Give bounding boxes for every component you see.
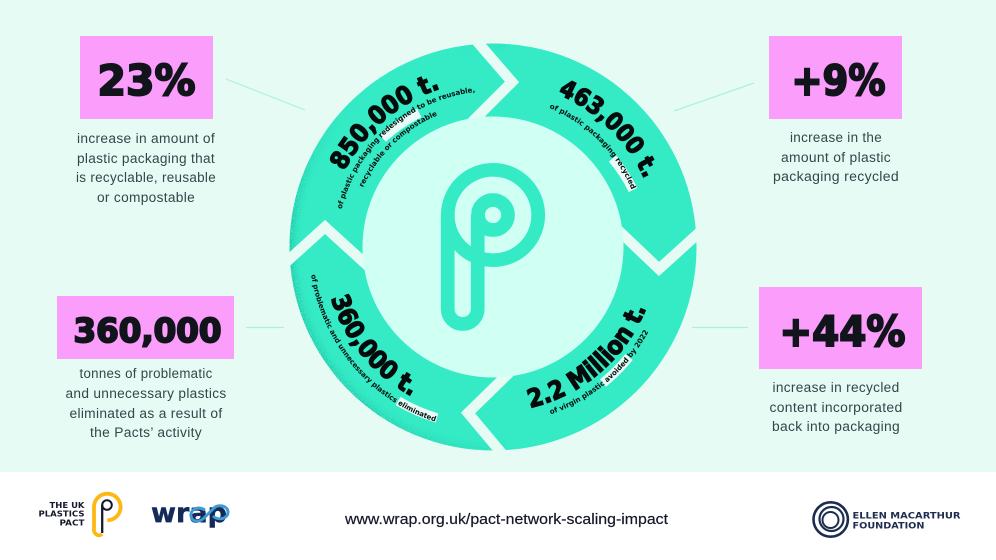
stat number: +9% xyxy=(792,56,886,105)
segment: 2.2 Million t.: of virgin plastic avoided by 2022 xyxy=(550,330,648,414)
leader line: 23% xyxy=(226,79,305,110)
stat panel: 360,000 xyxy=(57,296,234,440)
logo: WRAP: wrap xyxy=(151,498,227,529)
leader line: +44% xyxy=(692,326,748,328)
logo: The UK Plastics Pact: PLASTICS xyxy=(38,510,85,518)
stat panel: +9% xyxy=(769,36,902,184)
description xyxy=(770,380,902,434)
description: amount of plastic xyxy=(781,150,891,165)
chevron separators xyxy=(283,38,702,456)
logo: Ellen MacArthur Foundation xyxy=(814,502,961,537)
description: increase in the xyxy=(790,130,882,145)
logo: The UK Plastics Pact: PACT xyxy=(60,518,85,528)
stat panel: 23% xyxy=(76,36,216,205)
segment: 2.2 Million t.: 2.2 Million t. xyxy=(526,308,646,408)
description: content incorporated xyxy=(770,400,902,415)
inner circle xyxy=(362,116,624,378)
pink box xyxy=(769,36,902,119)
description: and unnecessary plastics xyxy=(66,386,226,401)
stat number: 360,000 xyxy=(74,311,222,350)
description: eliminated as a result of xyxy=(70,406,222,421)
stat number: 23% xyxy=(98,56,196,105)
logo: Ellen MacArthur Foundation: ELLEN MACARTHUR xyxy=(852,512,961,522)
pink box xyxy=(57,296,234,359)
description: increase in recycled xyxy=(772,380,900,395)
url: www.wrap.org.uk/pact-network-scaling-impact xyxy=(344,512,668,528)
description: is recyclable, reusable xyxy=(76,170,216,185)
circular arrow diagram xyxy=(290,44,696,450)
description: plastic packaging that xyxy=(77,151,215,166)
description: back into packaging xyxy=(772,419,900,434)
pink box xyxy=(759,287,922,369)
footer background xyxy=(0,472,996,560)
leader line: 360,000 xyxy=(246,326,284,328)
leader line: +9% xyxy=(674,83,754,111)
footer xyxy=(0,472,996,560)
segment: 850,000 t.: of plastic packaging redesigned to be reusable, xyxy=(338,88,475,208)
description xyxy=(773,130,899,184)
description: increase in amount of xyxy=(77,131,215,146)
stat panel: +44% xyxy=(759,287,922,434)
segment: 360,000 t.: of problematic and unnecessary plastics eliminated xyxy=(311,274,436,422)
ring xyxy=(290,44,696,450)
description: tonnes of problematic xyxy=(80,366,212,381)
segment: 463,000 t.: 463,000 t. xyxy=(559,80,655,178)
stat number: +44% xyxy=(780,307,906,356)
segment: 850,000 t.: 850,000 t. xyxy=(330,76,439,169)
icon: plastics pact P logo xyxy=(448,170,538,324)
description: the Pacts’ activity xyxy=(90,425,202,440)
segment: 360,000 t.: 360,000 t. xyxy=(331,294,413,396)
segment: 463,000 t.: of plastic packaging recycled xyxy=(550,105,636,190)
description xyxy=(76,131,216,205)
segment: 850,000 t.: recyclable or compostable xyxy=(360,112,437,187)
pink box xyxy=(80,36,213,119)
description xyxy=(66,366,226,440)
ring grain shading xyxy=(290,44,505,450)
logo: The UK Plastics Pact xyxy=(38,494,121,535)
logo: The UK Plastics Pact: THE UK xyxy=(50,501,85,510)
description: or compostable xyxy=(97,190,195,205)
description: packaging recycled xyxy=(773,169,899,184)
logo: Ellen MacArthur Foundation: FOUNDATION xyxy=(852,522,924,532)
